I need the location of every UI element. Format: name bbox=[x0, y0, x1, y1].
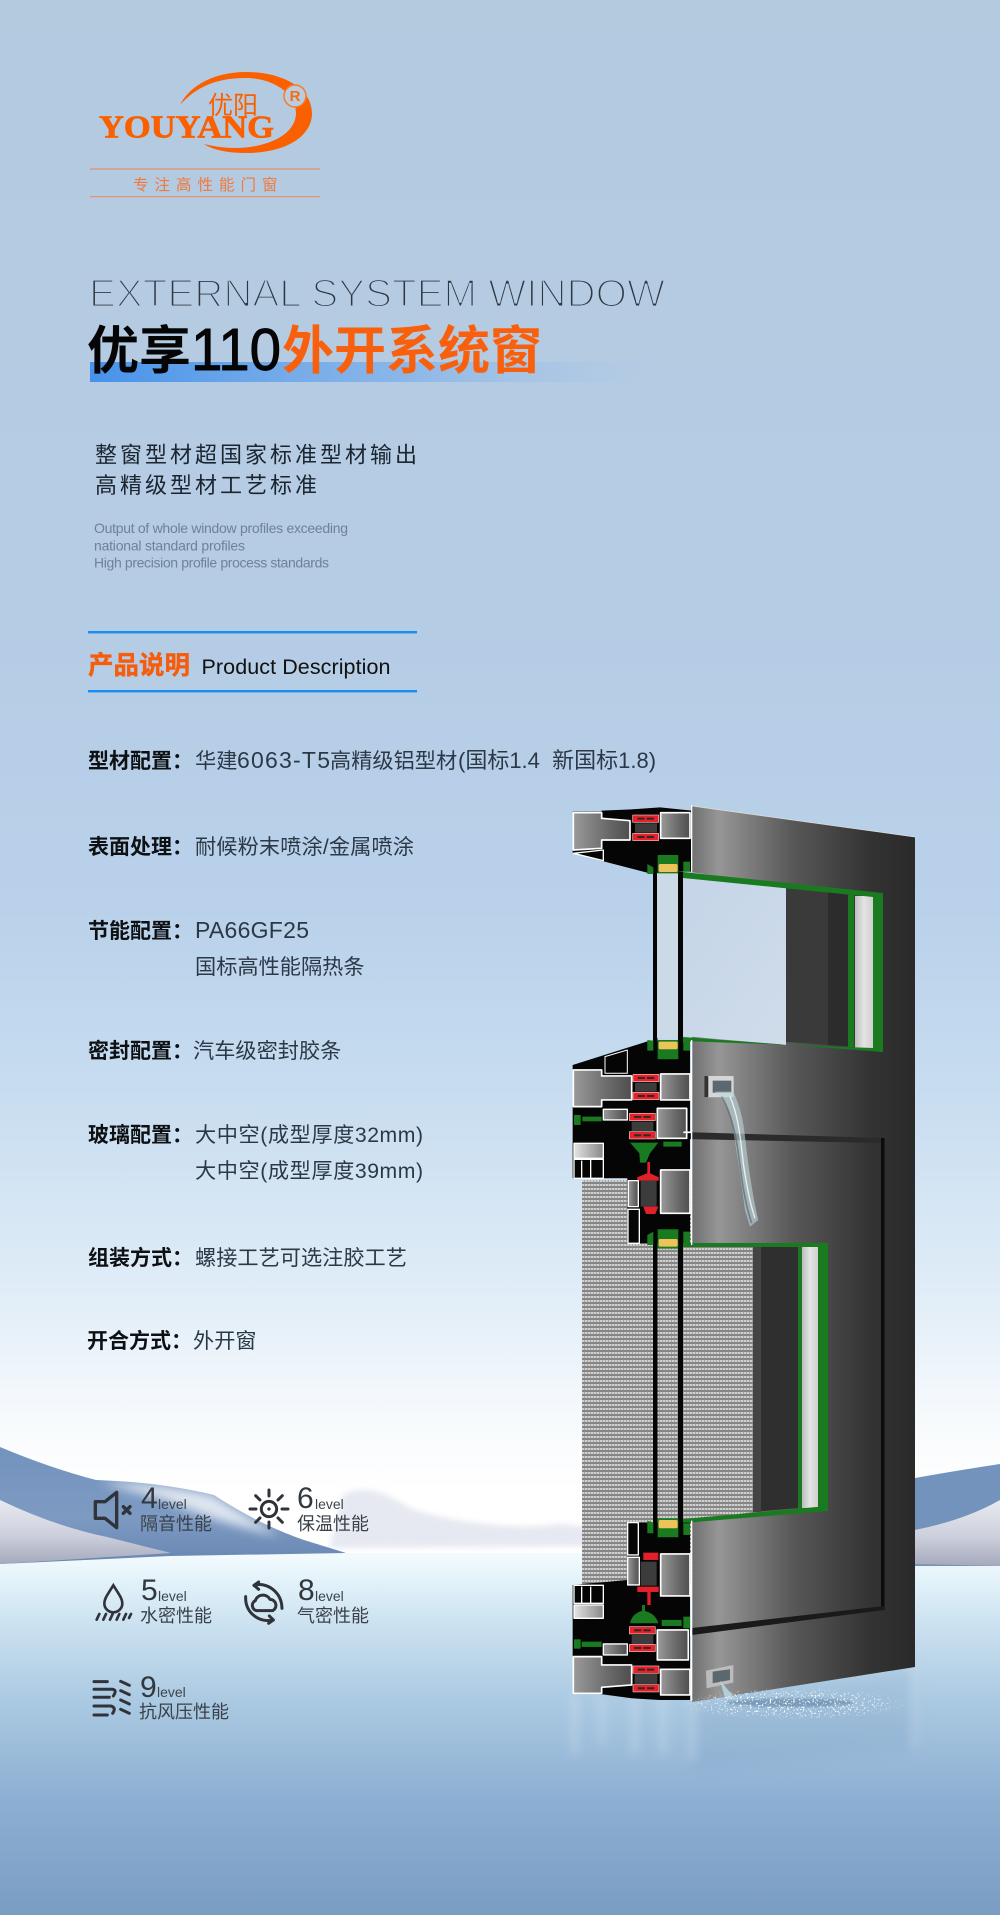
stat: water tightness: 5 bbox=[141, 1574, 158, 1607]
english description: national standard profiles bbox=[94, 538, 245, 554]
stat: heat: 保温性能 bbox=[297, 1514, 369, 1534]
stat: wind pressure: level bbox=[157, 1684, 186, 1700]
drain and water stream bbox=[704, 1076, 758, 1227]
logo: R bbox=[290, 88, 301, 105]
subtitle bbox=[95, 442, 420, 498]
spec: assembly bbox=[88, 1246, 407, 1270]
spec: profile: 华建 bbox=[195, 749, 237, 773]
stat: sound insulation: 隔音性能 bbox=[140, 1514, 212, 1534]
main title: 优享 bbox=[87, 323, 191, 381]
window render bbox=[573, 805, 915, 1720]
spec: seal bbox=[88, 1039, 341, 1063]
main title: 110 bbox=[191, 317, 281, 383]
icon: air tightness bbox=[246, 1582, 282, 1623]
logo: 专注高性能门窗 bbox=[133, 176, 284, 194]
icon: sound insulation bbox=[95, 1492, 130, 1528]
stat: air tightness: 气密性能 bbox=[297, 1606, 369, 1626]
icon: heat bbox=[250, 1490, 288, 1528]
lower recessed panel line bbox=[683, 1132, 884, 1636]
subtitle: 高精级型材工艺标准 bbox=[95, 473, 320, 498]
floor reflections bbox=[572, 1667, 917, 1770]
icon: wind pressure bbox=[94, 1681, 129, 1715]
right mountains bbox=[915, 1464, 1000, 1566]
stat: heat: 6 bbox=[297, 1482, 314, 1515]
spec: energy: 节能配置： bbox=[88, 920, 193, 943]
stat: sound insulation: level bbox=[158, 1496, 187, 1512]
logo: 优阳 bbox=[208, 92, 258, 120]
spec: seal: 汽车级密封胶条 bbox=[193, 1039, 341, 1063]
glass pane edges bbox=[653, 872, 683, 1530]
spec: seal: 密封配置： bbox=[88, 1039, 193, 1063]
logo: YOUYANG bbox=[99, 108, 274, 144]
spec: assembly: 螺接工艺可选注胶工艺 bbox=[195, 1246, 407, 1270]
spec: opening bbox=[87, 1329, 257, 1353]
stat: heat bbox=[297, 1482, 369, 1534]
spec: glass: 玻璃配置： bbox=[88, 1124, 193, 1147]
spec: profile: 型材配置： bbox=[88, 750, 193, 773]
stat: wind pressure: 抗风压性能 bbox=[139, 1702, 229, 1722]
icon: water tightness bbox=[97, 1585, 131, 1620]
english description: Output of whole window profiles exceeding bbox=[94, 520, 348, 536]
stat: air tightness: level bbox=[315, 1588, 344, 1604]
middle profile section bbox=[573, 1040, 692, 1249]
spec: glass: 大中空(成型厚度39mm) bbox=[195, 1159, 423, 1183]
section header: product description bbox=[88, 631, 417, 692]
stat: heat: level bbox=[315, 1496, 344, 1512]
top profile section bbox=[573, 805, 692, 874]
front face bbox=[692, 806, 915, 1702]
left mountains bbox=[0, 1447, 346, 1564]
spec: profile bbox=[88, 747, 656, 773]
spec: profile: 6063-T5 bbox=[237, 747, 330, 773]
spec: glass: 大中空(成型厚度32mm) bbox=[195, 1123, 423, 1147]
stat: wind pressure: 9 bbox=[140, 1671, 157, 1704]
logo bbox=[90, 72, 320, 197]
stat: wind pressure bbox=[139, 1671, 229, 1722]
section header: product description: 产品说明 bbox=[88, 652, 190, 680]
spec: surface: 表面处理： bbox=[88, 836, 193, 859]
spec: surface: 耐候粉末喷涂/金属喷涂 bbox=[195, 835, 414, 859]
spec: opening: 开合方式： bbox=[87, 1329, 192, 1353]
stat: water tightness: level bbox=[158, 1588, 187, 1604]
english description: High precision profile process standards bbox=[94, 554, 329, 570]
stat: sound insulation bbox=[140, 1482, 212, 1534]
title highlight bar bbox=[90, 362, 660, 382]
spec: opening: 外开窗 bbox=[193, 1329, 257, 1353]
section header: product description: Product Description bbox=[202, 655, 390, 679]
bottom profile section bbox=[573, 1518, 692, 1701]
spec: glass bbox=[88, 1123, 423, 1183]
spec: assembly: 组装方式： bbox=[88, 1246, 193, 1270]
spec: surface bbox=[88, 835, 414, 859]
upper opening bbox=[660, 868, 883, 1052]
far faint mountains bbox=[330, 1490, 620, 1548]
english description bbox=[94, 520, 348, 570]
main title bbox=[87, 317, 542, 383]
subtitle: 整窗型材超国家标准型材输出 bbox=[95, 442, 420, 468]
english heading: EXTERNAL SYSTEM WINDOW bbox=[89, 273, 666, 316]
water floor bbox=[0, 1553, 1000, 1915]
spec: energy: 国标高性能隔热条 bbox=[195, 955, 365, 979]
main title: 外开系统窗 bbox=[282, 323, 542, 381]
spec: energy bbox=[88, 917, 365, 979]
stat: air tightness: 8 bbox=[298, 1574, 315, 1607]
spec: energy: PA66GF25 bbox=[195, 917, 309, 943]
bottom drain and splash bbox=[677, 1665, 910, 1720]
spec: profile: 高精级铝型材 bbox=[330, 749, 457, 773]
stat: water tightness: 水密性能 bbox=[140, 1606, 212, 1626]
stat: sound insulation: 4 bbox=[141, 1482, 158, 1515]
stat: air tightness bbox=[297, 1574, 369, 1626]
stat: water tightness bbox=[140, 1574, 212, 1626]
lower opening with screen mesh bbox=[582, 1180, 828, 1585]
spec: profile: (国标1.4 新国标1.8) bbox=[458, 748, 656, 773]
